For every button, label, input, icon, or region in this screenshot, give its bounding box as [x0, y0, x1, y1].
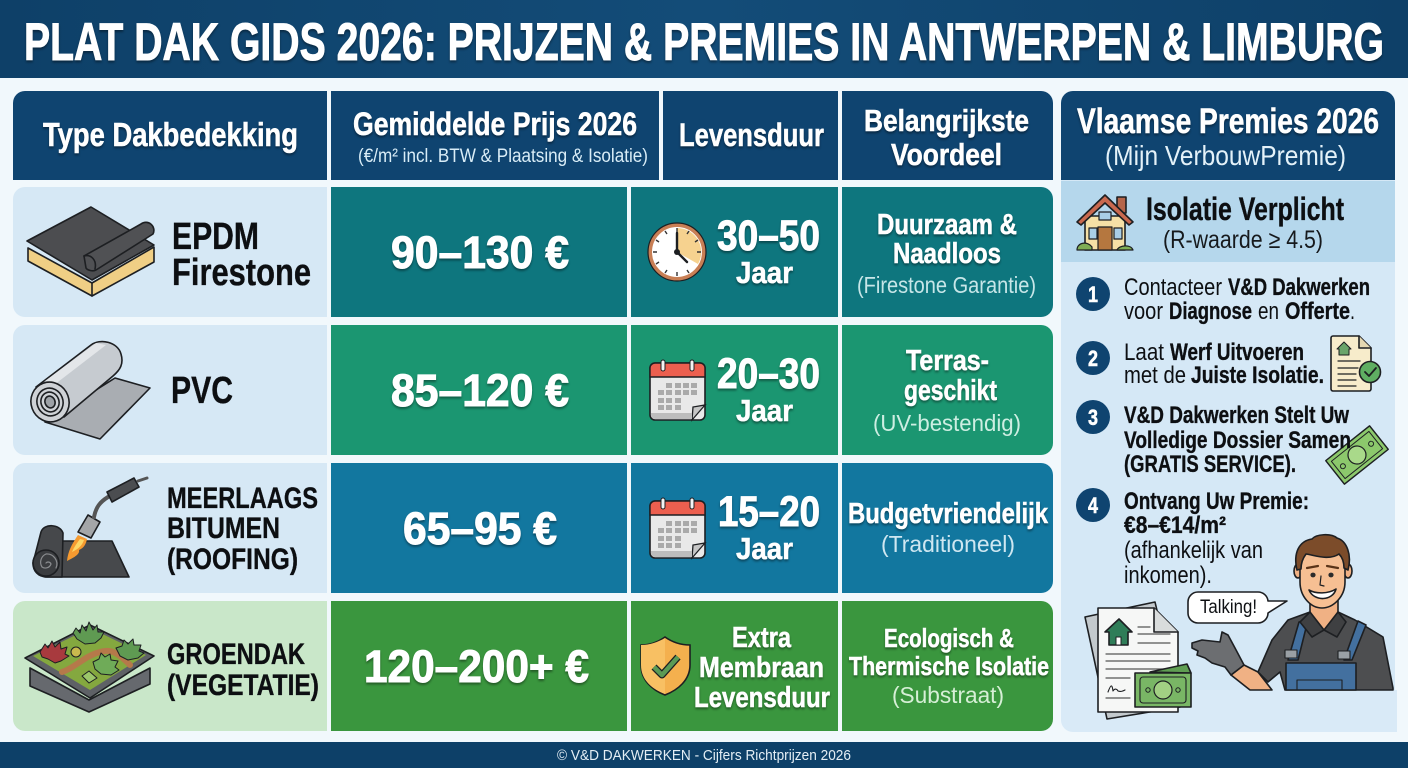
row: EPDM: [13, 187, 1053, 317]
benefit: green roof: Thermische Isolatie: [849, 651, 1049, 681]
step 4: Ontvang Uw Premie:: [1124, 488, 1309, 515]
column header: benefit: [842, 91, 1053, 180]
type cell: EPDM: [13, 187, 327, 317]
panel heading: (Mijn VerbouwPremie): [1105, 140, 1346, 171]
lifespan: green roof: [631, 601, 838, 731]
price: bitumen: [331, 463, 627, 593]
column header: lifespan: [663, 91, 838, 180]
step 4: [1076, 488, 1309, 589]
row: bitumen: [13, 463, 1053, 593]
lifespan: green roof: Membraan: [699, 652, 824, 684]
type cell: green roof: (VEGETATIE): [167, 669, 319, 702]
lifespan: EPDM: 30–50: [717, 212, 820, 260]
lifespan: green roof: Levensduur: [694, 682, 830, 714]
benefit: bitumen: (Traditioneel): [881, 531, 1015, 557]
icon: calendar: [650, 360, 705, 420]
title banner: [0, 0, 1408, 78]
benefit: EPDM: (Firestone Garantie): [857, 272, 1036, 298]
benefit: bitumen: Budgetvriendelijk: [848, 498, 1049, 530]
lifespan: PVC: 20–30: [717, 350, 820, 398]
benefit: EPDM: Naadloos: [893, 238, 1001, 270]
benefit: bitumen: [842, 463, 1053, 593]
price: EPDM: [331, 187, 627, 317]
lifespan: PVC: Jaar: [736, 393, 793, 428]
step 1: Contacteer: [1124, 274, 1222, 301]
step 3: 3: [1088, 405, 1098, 430]
type cell: green roof: GROENDAK: [167, 638, 305, 671]
step 4: inkomen).: [1124, 562, 1212, 589]
step 1: Diagnose: [1169, 298, 1252, 325]
column header: benefit: Belangrijkste: [864, 103, 1029, 138]
price: EPDM: 90–130 €: [391, 227, 569, 278]
step 1: V&D Dakwerken: [1228, 274, 1370, 301]
column header: lifespan: Levensduur: [679, 117, 824, 153]
column header: type: Type Dakbedekking: [43, 116, 298, 153]
benefit: green roof: [842, 601, 1053, 731]
type cell: EPDM: EPDM: [172, 216, 259, 258]
type cell: bitumen: (ROOFING): [167, 543, 298, 576]
illustration: documents and money: [1085, 602, 1191, 719]
step 2: Laat: [1124, 339, 1164, 366]
panel heading: [1061, 91, 1395, 180]
step 3: Volledige Dossier Samen: [1124, 427, 1351, 454]
step 2: [1076, 336, 1380, 391]
table header row: [13, 91, 1053, 180]
icon: PVC roll: [25, 342, 150, 439]
lifespan: PVC: [631, 325, 838, 455]
icon: calendar: [650, 498, 705, 558]
benefit: EPDM: [842, 187, 1053, 317]
step 2: 2: [1088, 346, 1098, 371]
step 1: 1: [1088, 282, 1098, 307]
type cell: green roof: [13, 601, 327, 731]
price: PVC: [331, 325, 627, 455]
footer bar: [0, 742, 1408, 768]
step 4: €8–€14/m²: [1124, 512, 1226, 539]
row: PVC: [13, 325, 1053, 455]
column header: benefit: Voordeel: [891, 137, 1002, 172]
row: green roof: [13, 601, 1053, 731]
lifespan: bitumen: [631, 463, 838, 593]
insulation requirement band: (R-waarde ≥ 4.5): [1163, 226, 1323, 254]
speech bubble: Talking!: [1200, 597, 1257, 618]
step 1: Offerte: [1285, 298, 1350, 325]
insulation requirement band: Isolatie Verplicht: [1146, 191, 1344, 227]
step 4: (afhankelijk van: [1124, 537, 1263, 564]
type cell: EPDM: Firestone: [172, 252, 311, 294]
icon: document with check: [1331, 336, 1380, 391]
price: PVC: 85–120 €: [391, 365, 569, 416]
step 2: met de: [1124, 362, 1186, 389]
step 2: Werf Uitvoeren: [1170, 339, 1304, 366]
lifespan: green roof: Extra: [732, 622, 792, 654]
benefit: PVC: [842, 325, 1053, 455]
type cell: bitumen: BITUMEN: [167, 512, 280, 545]
benefit: EPDM: Duurzaam &: [877, 209, 1017, 241]
step 3: [1076, 400, 1388, 484]
icon: house: [1077, 195, 1133, 250]
illustration: roofer: [1192, 535, 1393, 690]
type cell: PVC: [13, 325, 327, 455]
type cell: PVC: PVC: [171, 370, 233, 412]
icon: EPDM membrane on insulation: [27, 207, 154, 296]
icon: shield with check: [641, 637, 690, 695]
benefit: green roof: (Substraat): [892, 682, 1004, 708]
column header: price: Gemiddelde Prijs 2026: [353, 106, 637, 142]
benefit: PVC: (UV-bestendig): [873, 410, 1021, 436]
panel: Vlaamse premies: [1061, 91, 1397, 732]
step 1: voor: [1124, 298, 1163, 325]
step 3: V&D Dakwerken Stelt Uw: [1124, 402, 1349, 429]
type cell: bitumen: [13, 463, 327, 593]
column header: type: [13, 91, 327, 180]
speech bubble: [1188, 592, 1287, 623]
step 3: (GRATIS SERVICE).: [1124, 451, 1296, 478]
type cell: bitumen: MEERLAAGS: [167, 482, 318, 515]
icon: bitumen roll and torch: [33, 478, 147, 577]
price: bitumen: 65–95 €: [403, 503, 557, 554]
benefit: green roof: Ecologisch &: [884, 623, 1014, 653]
column header: price: (€/m² incl. BTW & Plaatsing & Isolatie): [358, 146, 648, 167]
price: green roof: [331, 601, 627, 731]
lifespan: bitumen: 15–20: [718, 488, 820, 536]
step 1: .: [1350, 298, 1355, 325]
icon: clock: [648, 223, 706, 281]
step 2: Juiste Isolatie.: [1191, 362, 1324, 389]
footer credit: © V&D DAKWERKEN - Cijfers Richtprijzen 2026: [557, 747, 851, 764]
icon: green roof tray: [25, 622, 154, 712]
step 1: en: [1258, 298, 1279, 325]
step 4: 4: [1088, 493, 1099, 518]
price: green roof: 120–200+ €: [364, 641, 589, 692]
lifespan: EPDM: Jaar: [736, 255, 793, 290]
step 1: [1076, 274, 1370, 325]
insulation requirement band: [1061, 181, 1395, 262]
lifespan: EPDM: [631, 187, 838, 317]
column header: price: [331, 91, 659, 180]
icon: banknote: [1326, 426, 1388, 484]
lifespan: bitumen: Jaar: [736, 531, 793, 566]
benefit: PVC: Terras-: [906, 345, 989, 377]
benefit: PVC: geschikt: [904, 375, 997, 407]
